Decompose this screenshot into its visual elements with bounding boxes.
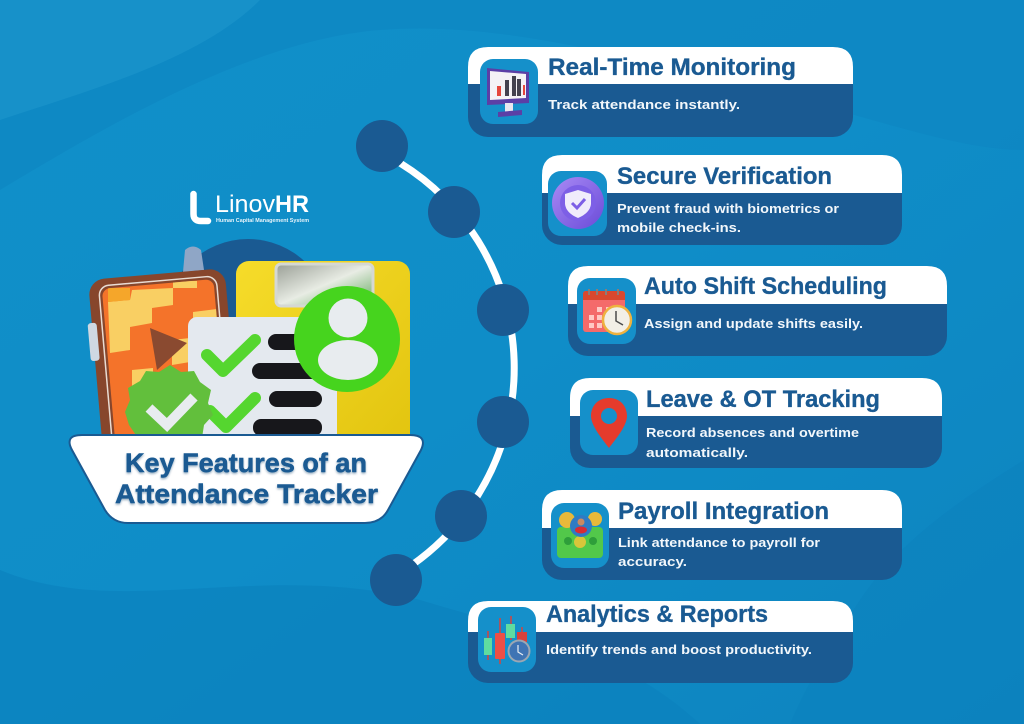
logo: LinovHR: Human Capital Management System	[216, 218, 309, 224]
icon: candlestick chart with clock	[484, 616, 530, 664]
logo: LinovHR: HR	[275, 191, 309, 218]
timeline node 1	[356, 120, 408, 172]
panel: Leave & OT Tracking: Leave & OT Tracking	[646, 386, 880, 413]
panel: Analytics & Reports: Identify trends and boost productivity.	[546, 643, 812, 657]
panel: Payroll Integration: Link attendance to payroll for	[618, 536, 820, 550]
timeline node 2	[428, 186, 480, 238]
icon: clipboard	[236, 261, 410, 451]
title banner	[70, 435, 423, 523]
panel: Secure Verification: Prevent fraud with biometrics or	[617, 202, 839, 216]
logo: LinovHR: Linov	[215, 191, 275, 218]
timeline arc	[382, 146, 514, 580]
backdrop circle	[182, 239, 304, 317]
timeline node 6	[370, 554, 422, 606]
icon: mobile device	[88, 246, 229, 434]
panel: Secure Verification: mobile check-ins.	[617, 221, 741, 235]
panel: Payroll Integration: Payroll Integration	[618, 498, 829, 525]
illustration: attendance tracker devices	[88, 239, 410, 434]
panel: Leave & OT Tracking: automatically.	[646, 446, 748, 460]
icon: shield	[552, 177, 604, 229]
logo: LinovHR	[194, 191, 309, 224]
icon: monitor chart	[487, 68, 529, 117]
timeline node 4	[477, 396, 529, 448]
icon: location pin	[591, 398, 627, 448]
panel: Payroll Integration	[542, 490, 902, 580]
title banner: Attendance Tracker	[115, 479, 379, 509]
panel: Secure Verification	[542, 155, 902, 245]
timeline node 5	[435, 490, 487, 542]
icon: green user badge	[294, 286, 400, 392]
panel: Real-Time Monitoring: Real-Time Monitoring	[548, 54, 796, 81]
panel: Leave & OT Tracking: Record absences and overtime	[646, 426, 859, 440]
icon: calendar and clock	[583, 289, 631, 334]
panel: Analytics & Reports: Analytics & Reports	[546, 601, 768, 628]
panel: Auto Shift Scheduling: Assign and update shifts easily.	[644, 317, 863, 331]
panel: Secure Verification: Secure Verification	[617, 163, 832, 190]
panel: Leave & OT Tracking	[570, 378, 942, 468]
icon: money and person	[557, 512, 603, 558]
panel: Payroll Integration: accuracy.	[618, 555, 687, 569]
panel: Analytics & Reports	[468, 601, 853, 683]
panel: Real-Time Monitoring: Track attendance instantly.	[548, 98, 740, 112]
checklist sheet	[188, 317, 337, 434]
panel: Real-Time Monitoring	[468, 47, 853, 137]
panel: Auto Shift Scheduling	[568, 266, 947, 356]
panel: Auto Shift Scheduling: Auto Shift Scheduling	[644, 273, 887, 300]
timeline node 3	[477, 284, 529, 336]
title banner: Key Features of an	[125, 448, 367, 478]
icon: verified seal	[125, 365, 213, 438]
